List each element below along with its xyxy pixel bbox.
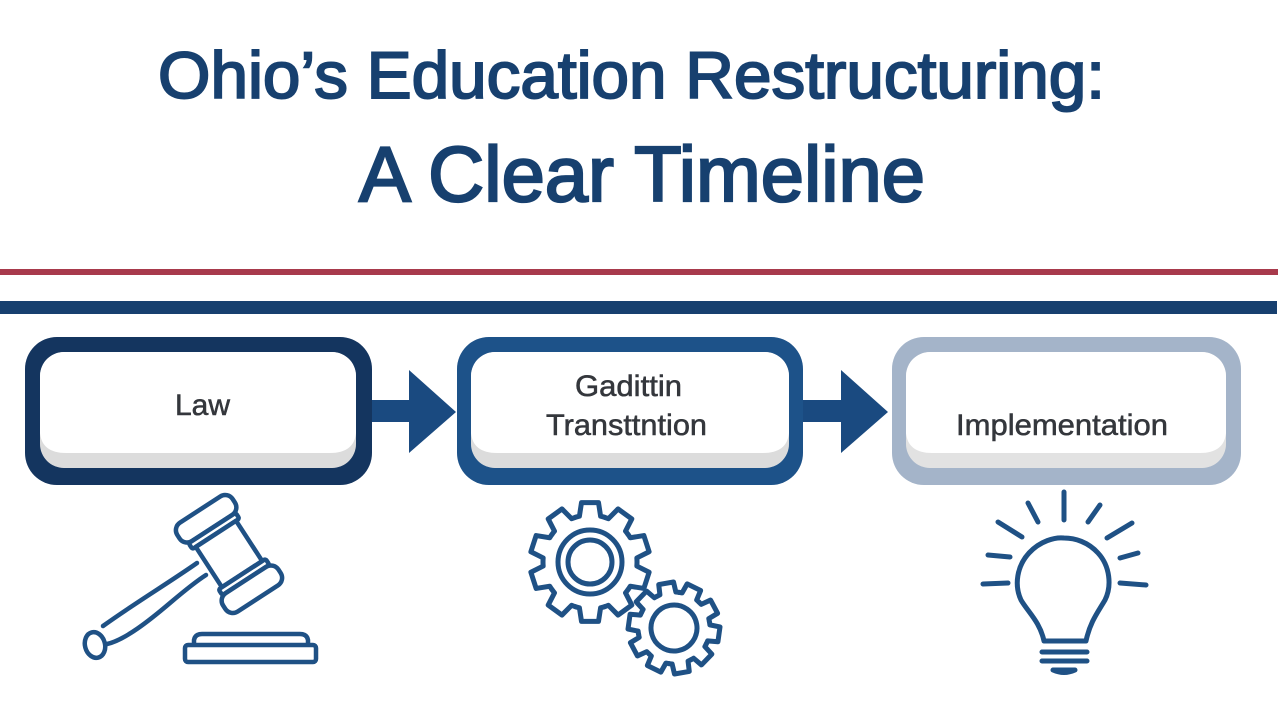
- navy divider rule: [0, 301, 1277, 314]
- title: [158, 38, 1105, 218]
- arrow: Law to Transition: [372, 370, 456, 453]
- large gear: [529, 503, 651, 621]
- icon: light bulb: [983, 492, 1146, 672]
- red divider rule: [0, 269, 1278, 275]
- icon: gavel: [82, 492, 316, 662]
- step 2: Transition box: Transttntion: [546, 409, 707, 442]
- step 2: Transition box: [457, 337, 803, 485]
- icon: gears: [529, 503, 728, 681]
- title: Ohio’s Education Restructuring:: [158, 38, 1105, 112]
- step 2: Transition box: Gadittin: [575, 370, 682, 403]
- step 1: Law box: [25, 337, 372, 485]
- step 1: Law box: Law: [175, 389, 230, 422]
- small gear: [620, 575, 728, 681]
- title: A Clear Timeline: [359, 130, 925, 218]
- step 3: Implementation box: Implementation: [956, 409, 1168, 442]
- arrow: Transition to Implementation: [803, 370, 888, 453]
- step 3: Implementation box: [892, 337, 1241, 485]
